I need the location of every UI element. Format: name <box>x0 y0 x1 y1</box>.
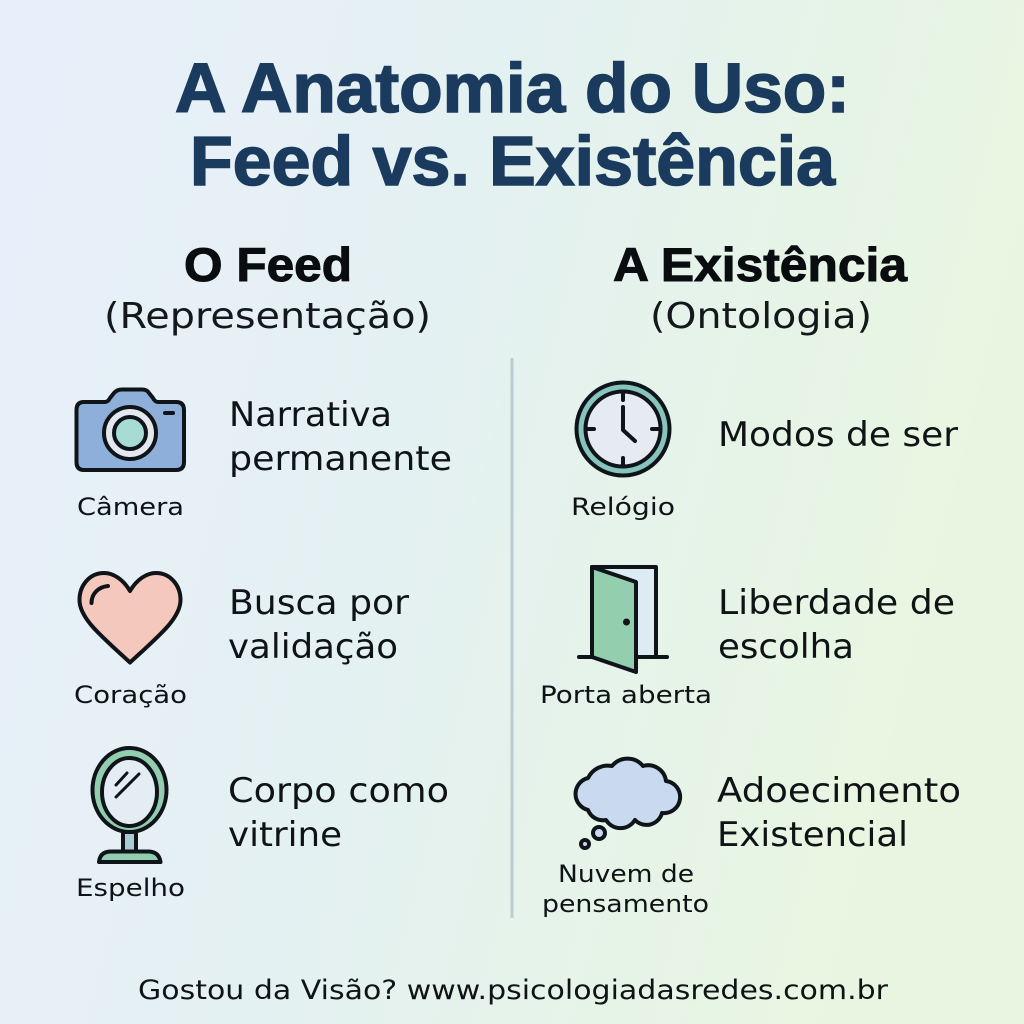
text: Modos de ser: Modos de ser <box>718 415 958 455</box>
icon: heart <box>80 573 180 662</box>
title: Feed vs. Existência <box>190 122 836 200</box>
panel: A Existência items <box>540 382 961 918</box>
heading: O Feed (Representação) <box>104 238 431 337</box>
text: Busca por validação: Busca por <box>229 583 409 623</box>
icon: mirror <box>92 748 166 862</box>
title: A Anatomia do Uso: <box>175 49 850 127</box>
text: Narrativa permanente: permanente <box>229 439 452 479</box>
icon: camera <box>76 390 184 470</box>
icon: open door <box>579 567 667 672</box>
item: coração <box>74 573 409 709</box>
text: Corpo como vitrine <box>228 771 449 855</box>
item: porta aberta <box>540 567 955 709</box>
icon: clock <box>576 382 670 476</box>
text: Adoecimento Existencial: Adoecimento <box>717 771 961 811</box>
heading: A Existência (Ontologia): (Ontologia) <box>650 296 872 337</box>
text: Narrativa permanente: Narrativa <box>229 395 392 435</box>
heading: A Existência (Ontologia): A Existência <box>613 238 908 291</box>
label: Coração: Coração <box>74 681 187 709</box>
label: Câmera: Câmera <box>77 493 184 521</box>
label: Porta aberta: Porta aberta <box>540 681 712 709</box>
text: Liberdade de escolha: escolha <box>718 627 854 667</box>
item: nuvem de pensamento <box>542 759 961 918</box>
label: Nuvem de pensamento: pensamento <box>542 890 709 918</box>
label: Espelho: Espelho <box>76 874 185 902</box>
label: Nuvem de pensamento <box>542 860 709 918</box>
text: Busca por validação: validação <box>228 627 398 667</box>
text: Liberdade de escolha: Liberdade de <box>718 583 955 623</box>
panel: O Feed items <box>74 390 452 902</box>
heading: O Feed (Representação): (Representação) <box>104 296 431 337</box>
label: Nuvem de pensamento: Nuvem de <box>558 860 694 888</box>
text: Corpo como vitrine: vitrine <box>228 815 342 855</box>
text: Corpo como vitrine: Corpo como <box>228 771 449 811</box>
text: Busca por validação <box>228 583 409 667</box>
title <box>175 49 850 200</box>
text: Liberdade de escolha <box>718 583 955 667</box>
label: Relógio: Relógio <box>571 493 675 521</box>
item: relógio <box>571 382 958 521</box>
text: Adoecimento Existencial <box>717 771 961 855</box>
icon: thought cloud <box>576 759 680 848</box>
column divider <box>510 358 514 918</box>
item: espelho <box>76 748 449 902</box>
text: Adoecimento Existencial: Existencial <box>717 815 908 855</box>
heading: A Existência (Ontologia) <box>613 238 908 337</box>
footer: Gostou da Visão? www.psicologiadasredes.com.br <box>138 975 889 1006</box>
item: câmera <box>76 390 452 521</box>
text: Narrativa permanente <box>229 395 452 479</box>
heading: O Feed (Representação): O Feed <box>184 238 352 291</box>
